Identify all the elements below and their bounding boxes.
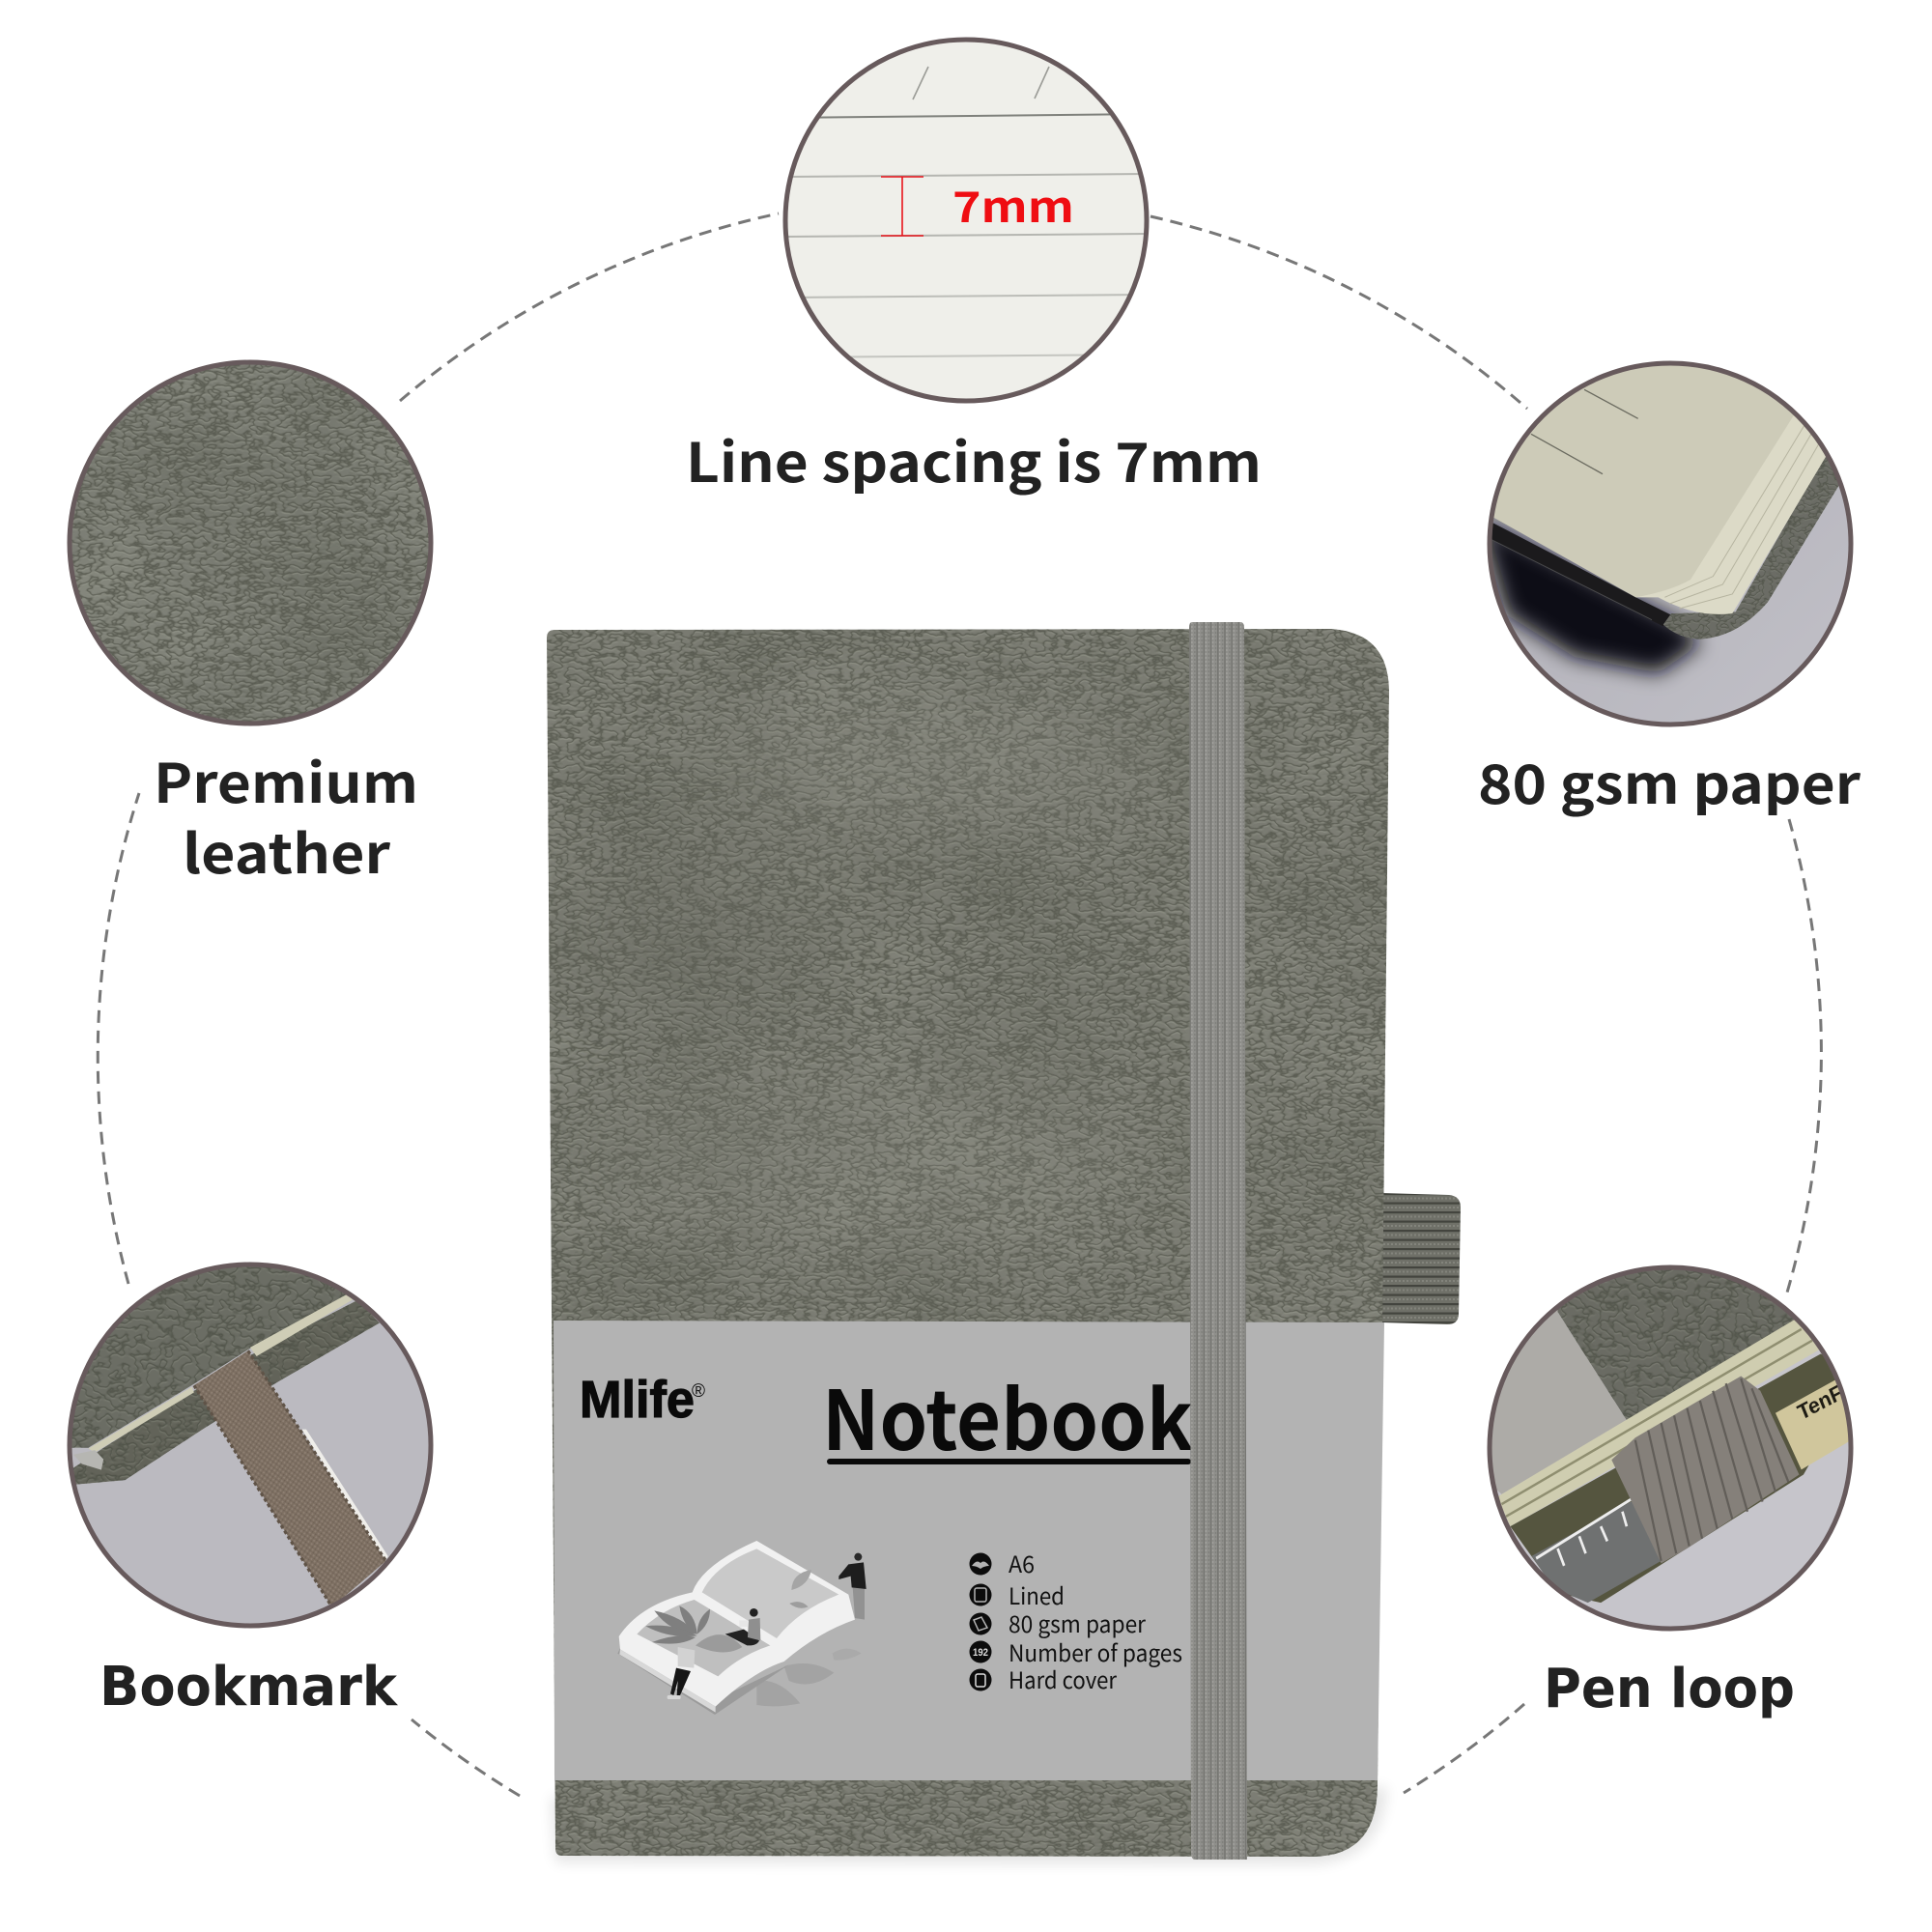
notebook — [541, 622, 1461, 1864]
heading: Premium — [154, 741, 418, 819]
heading — [154, 741, 418, 890]
spec: hard cover: Hard cover — [1009, 1662, 1118, 1695]
heading: Line spacing is 7mm — [686, 420, 1262, 498]
notebook soft shadow — [551, 1787, 1387, 1864]
panel: 80 gsm paper — [1478, 351, 1884, 820]
spec: Lined: Lined — [1009, 1577, 1065, 1611]
spec: Lined — [970, 1577, 1065, 1611]
spec: A6 — [970, 1546, 1035, 1579]
pen loop photo — [1492, 1269, 1849, 1627]
panel: bookmark — [61, 1254, 440, 1719]
heading: Bookmark — [99, 1656, 399, 1719]
spec: hard cover — [970, 1662, 1118, 1695]
leather swatch — [70, 362, 431, 724]
panel: pen loop — [1480, 1258, 1860, 1720]
open book — [619, 1541, 855, 1707]
spec: paper weight: 80 gsm paper — [1009, 1605, 1147, 1639]
small leaves on right page — [791, 1570, 811, 1590]
spec: page count: 192 — [973, 1647, 988, 1659]
book shadow — [617, 1645, 789, 1715]
7mm dimension marker — [881, 173, 1074, 236]
circle border — [1490, 1267, 1851, 1629]
large leaves on book page — [645, 1605, 742, 1652]
ribbon photo — [71, 1267, 429, 1623]
book illustration — [617, 1541, 867, 1715]
seated reader — [725, 1608, 760, 1645]
heading: leather — [183, 811, 391, 890]
spec: A6: A6 — [1009, 1546, 1035, 1579]
circle border — [70, 1264, 431, 1626]
pen loop on notebook side — [1381, 1193, 1461, 1324]
panel: premium leather — [70, 362, 431, 890]
7mm dimension marker: 7mm — [952, 173, 1074, 235]
ruled paper close-up — [782, 37, 1150, 404]
brand logo: ® — [692, 1381, 705, 1402]
standing figure — [838, 1553, 867, 1620]
elastic closure band — [1189, 622, 1247, 1860]
circle border — [785, 40, 1147, 401]
leather tonal mottling — [593, 708, 1136, 1213]
belly band label — [554, 1321, 1384, 1780]
dashed ring connecting the feature circles — [98, 213, 1821, 1796]
spec list — [970, 1546, 1182, 1695]
faint leaves beneath the book — [756, 1649, 862, 1706]
pen loop photo: TenF — [1795, 1380, 1846, 1425]
heading: 80 gsm paper — [1478, 742, 1861, 820]
circle border — [70, 362, 431, 724]
leather cover — [547, 629, 1389, 1857]
paper corner photo — [1492, 365, 1849, 723]
heading: Pen loop — [1544, 1658, 1795, 1720]
spec: page count: Number of pages — [1009, 1634, 1182, 1668]
brand logo: Mlife — [580, 1371, 695, 1429]
notebook title: Notebook — [822, 1355, 1193, 1474]
sitting figure on book edge — [668, 1647, 695, 1699]
panel: line spacing — [686, 37, 1262, 498]
circle border — [1490, 363, 1851, 724]
